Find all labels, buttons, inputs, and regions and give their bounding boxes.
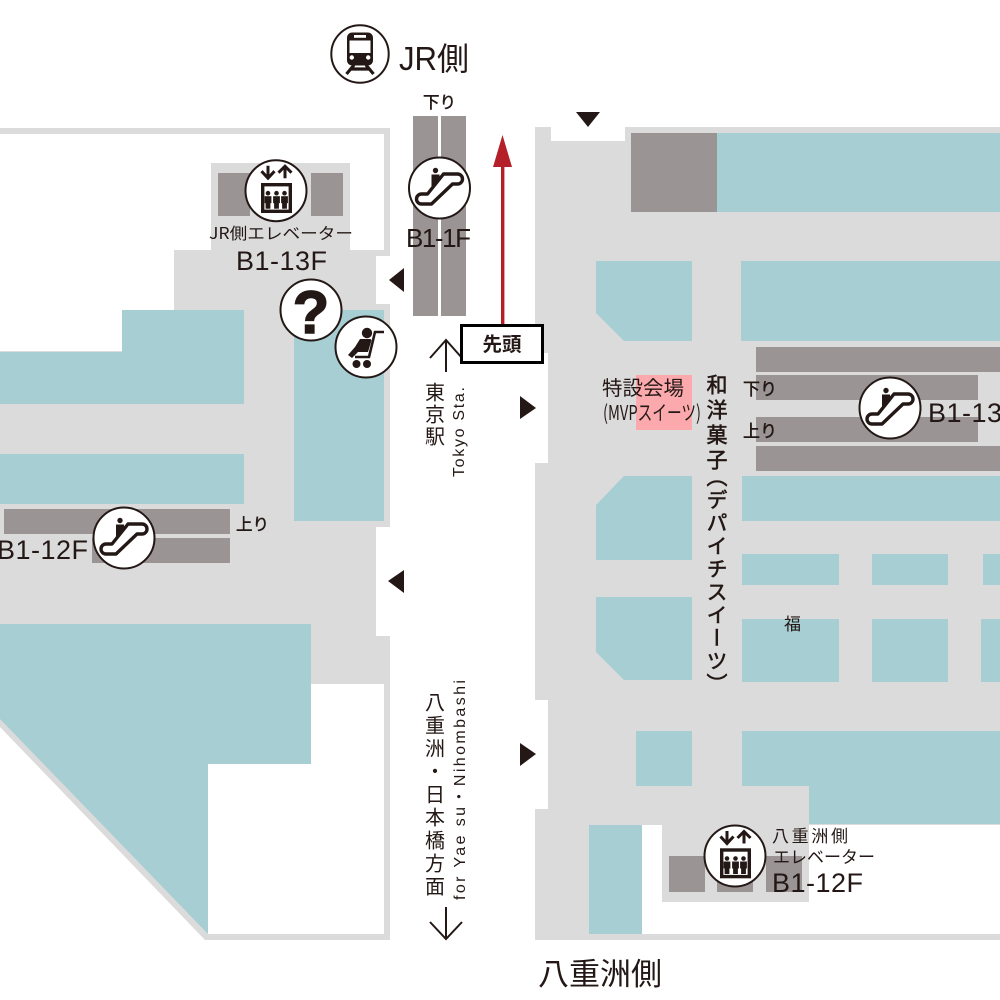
label: B1-1F: B1-1F [406,223,471,253]
icon: entrance triangle top [576,112,600,127]
label: B1-13F left: B1-13F [236,246,327,276]
icon: entrance triangle lower left [388,570,404,593]
icon: entrance triangle upper right [520,396,536,419]
callout: front of train [462,326,542,362]
arrow: red direction [493,135,512,325]
icon: entrance triangle upper left [389,268,404,292]
icon: train [331,25,389,83]
icon: information question: ? [293,279,329,346]
label: Yaesu side elevator: B1-12F [772,868,863,898]
callout: front of train: 先頭 [482,328,522,357]
label: fuku: 福 [784,610,801,635]
label: Yaesu side elevator: 八重洲側 [772,822,848,847]
label: up left: 上り [236,511,269,535]
label: Yaesu Nihombashi Japanese: 八重洲・日本橋方面 [420,692,450,899]
label: for Yaesu Nihombashi: for Yae su・Nihombashi [452,680,469,900]
label: down right: 下り [743,375,777,400]
label: JR side elevator: JR側エレベーター [209,220,353,244]
label: down escalator top: 下り [423,89,456,113]
label: Tokyo station Japanese: 東京駅 [420,382,450,448]
icon: information question [280,279,342,346]
icon: elevator Yaesu side [704,826,766,886]
icon: elevator JR side [246,160,306,221]
panel: right floor area [535,127,1000,940]
label: Yaesu side elevator: エレベーター [773,843,875,868]
icon: stroller [336,316,396,378]
heading: JR side: JR [399,40,437,77]
heading: JR side [399,34,469,80]
icon: entrance triangle lower right [520,743,536,766]
heading: JR side: 側 [437,34,469,80]
arrow: to Tokyo station [430,340,462,372]
label: special venue: 特設会場 [602,372,684,401]
arrow: to Yaesu [430,907,462,939]
heading: Yaesu side: 八重洲側 [538,949,662,994]
label: Yaesu side elevator [772,822,875,898]
label: confectionery vertical: （デパイチスイーツ） [702,466,732,696]
label: special venue [602,372,701,426]
panel: central escalator B1-1F [413,116,466,316]
icon: escalator left [94,508,154,568]
label: confectionery vertical: 和洋菓子 [702,374,732,474]
label: up right: 上り [743,417,777,442]
icon: escalator right [860,378,920,438]
panel: left floor area [0,128,390,940]
label: special venue: (MVPスイーツ) [603,396,701,426]
label: Tokyo Sta.: Tokyo Sta. [451,387,468,477]
icon: escalator top [409,158,470,218]
